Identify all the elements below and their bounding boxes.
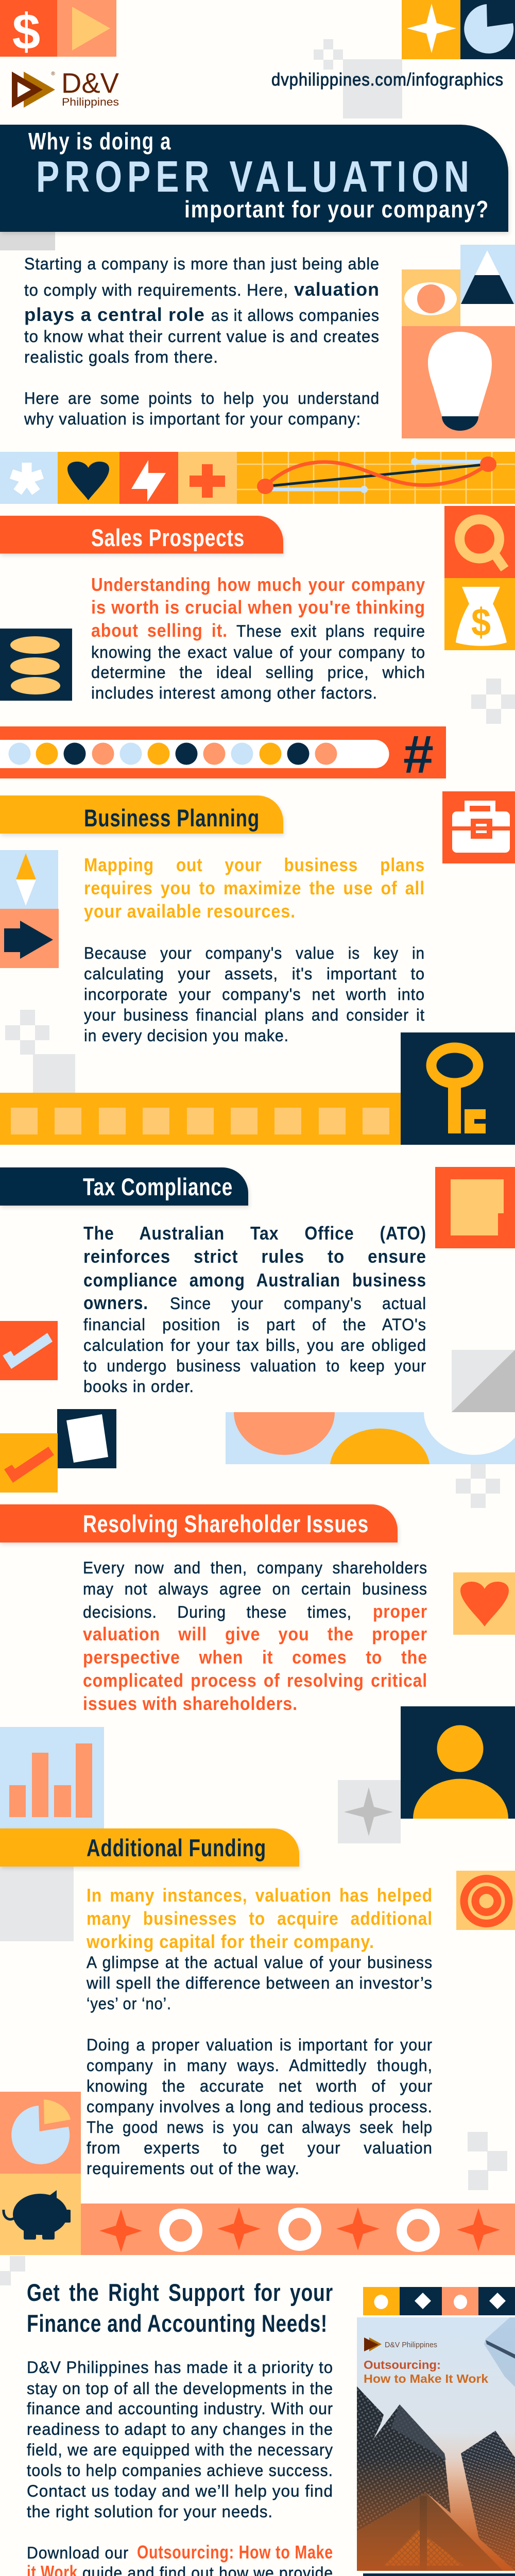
text block: shareholders: proper xyxy=(373,1601,427,1622)
text block: business planning xyxy=(84,854,425,1045)
icon: piggy bank tile xyxy=(0,2174,81,2255)
text block: sales: is worth is crucial when you're thinking xyxy=(91,597,425,618)
intro text block: valuation xyxy=(294,279,380,300)
intro text block: realistic goals from there. xyxy=(24,348,218,366)
text block: additional funding: company in many ways. Admittedly though, xyxy=(87,2056,433,2075)
section: Business Planning xyxy=(0,791,515,1145)
dots strip with hash: # xyxy=(403,725,434,785)
text block: shareholders: complicated process of resolving critical xyxy=(83,1670,427,1691)
text block: business planning: Mapping out your business plans xyxy=(84,854,425,875)
icon: briefcase tile xyxy=(442,791,515,863)
cover title: Outsourcing: xyxy=(364,2358,441,2371)
heading: Business Planning: Business Planning xyxy=(84,804,260,832)
text block: tax compliance: books in order. xyxy=(83,1377,194,1396)
text block: shareholders: decisions. During these times, xyxy=(83,1603,352,1621)
section: Tax Compliance xyxy=(0,1167,515,1508)
title banner: Why is doing a xyxy=(28,128,171,155)
stars and rings strip xyxy=(81,2204,515,2255)
header decorative tiles xyxy=(0,0,515,118)
text block: business planning: calculating your assets, it's important to xyxy=(84,964,425,983)
icon: check tile orange xyxy=(0,1433,58,1493)
section: Resolving Shareholder Issues xyxy=(0,1504,515,1843)
intro text block: Here are some points to help you understand xyxy=(24,389,380,408)
text block: business planning: in every decision you make. xyxy=(84,1026,289,1045)
icon: dollar tile xyxy=(0,0,57,60)
icon: paper tile xyxy=(57,1409,116,1468)
intro text block: to comply with requirements. Here, xyxy=(24,281,288,299)
text block: closing: D&V Philippines has made it a priority to xyxy=(27,2358,333,2377)
intro text block: why valuation is important for your company: xyxy=(24,410,361,428)
stripes under guide cover xyxy=(363,2573,515,2576)
guide cover xyxy=(357,2317,515,2571)
logo: D&V Philippines: ® xyxy=(51,71,55,77)
text block: sales: Understanding how much your company xyxy=(91,574,425,595)
text block: closing: Outsourcing: How to Make xyxy=(137,2541,333,2563)
heading: get the right support: Finance and Accounting Needs! xyxy=(27,2310,328,2337)
icon: eye xyxy=(402,269,460,326)
text block: additional funding: A glimpse at the actual value of your business xyxy=(87,1953,433,1972)
text block: additional funding: knowing the accurate net worth of your xyxy=(87,2077,433,2095)
text block: shareholders: Every now and then, company shareholders xyxy=(83,1558,427,1577)
grey pixel decoration xyxy=(5,1010,75,1093)
heading: Tax Compliance: Tax Compliance xyxy=(83,1173,233,1200)
text block: additional funding: ‘yes’ or ‘no’. xyxy=(87,1994,171,2013)
text block: additional funding: The good news is you can always seek help xyxy=(87,2118,433,2137)
heading: Tax Compliance xyxy=(0,1167,248,1206)
icon: arrow tile xyxy=(0,909,59,968)
text block: closing: the right solution for your needs. xyxy=(27,2502,273,2521)
text block: closing: field, we are equipped with the necessary xyxy=(27,2441,333,2459)
text block: additional funding: Doing a proper valuation is important for your xyxy=(87,2036,433,2054)
text block: tax compliance: financial position is part of the ATO's xyxy=(83,1315,426,1334)
icon: key tile xyxy=(401,1032,515,1145)
icon strip with graph xyxy=(0,452,515,504)
cover logo: D&V Philippines xyxy=(385,2341,437,2349)
heading: Resolving Shareholder Issues: Resolving Shareholder Issues xyxy=(83,1510,369,1537)
text block: additional funding xyxy=(86,1885,433,2178)
icon: star tile xyxy=(402,0,460,59)
icon: document tile xyxy=(435,1167,515,1248)
icon: pie chart tile xyxy=(0,2092,81,2174)
text block: shareholders: issues with shareholders. xyxy=(83,1693,298,1714)
grey pixel decoration xyxy=(0,2132,507,2285)
cover title xyxy=(364,2358,488,2385)
icon: compass tile xyxy=(0,850,58,909)
text block: sales: includes interest among other factors. xyxy=(91,684,377,702)
icon: money bag tile xyxy=(444,578,515,650)
icon: heart xyxy=(58,452,119,504)
icon: dollar tile: $ xyxy=(12,3,40,60)
text block: business planning: Because your company's value is key in xyxy=(84,944,425,962)
text block: additional funding: company involves a long and tedious process. xyxy=(87,2097,433,2116)
heading: Additional Funding: Additional Funding xyxy=(87,1834,266,1861)
text block: tax compliance: The Australian Tax Office (ATO) xyxy=(83,1223,426,1244)
text block: closing: readiness to adapt to any changes in the xyxy=(27,2420,333,2438)
text block: sales: determine the ideal selling price, which xyxy=(91,663,425,682)
icon: plus xyxy=(178,452,237,504)
text block: additional funding: working capital for their company. xyxy=(86,1931,374,1952)
heading: Sales Prospects: Sales Prospects xyxy=(91,524,245,551)
text block: business planning: incorporate your company's net worth into xyxy=(84,985,425,1004)
text block: closing xyxy=(27,2358,333,2576)
text block: tax compliance: to undergo business valuation to keep your xyxy=(83,1357,426,1375)
text block: closing: stay on top of all the developments in the xyxy=(27,2379,333,2398)
text block: tax compliance: compliance among Australian business xyxy=(83,1269,426,1291)
heading: Sales Prospects xyxy=(0,516,283,553)
icon: magnifier tile xyxy=(444,506,515,578)
grey pixel decoration xyxy=(314,39,402,118)
heading: get the right support xyxy=(27,2279,333,2337)
text block: shareholders xyxy=(83,1558,427,1714)
heading: Resolving Shareholder Issues xyxy=(0,1504,398,1543)
cover logo xyxy=(364,2337,437,2351)
section: closing call to action xyxy=(27,2279,515,2576)
text block: closing: Contact us today and we’ll help you find xyxy=(27,2482,333,2500)
title banner xyxy=(0,125,508,250)
icon: pie tile xyxy=(460,0,515,59)
text block: business planning: requires you to maximize the use of all xyxy=(84,877,425,899)
text block: tax compliance: owners. xyxy=(83,1292,148,1313)
icon: stacked coins tile xyxy=(0,629,72,701)
logo: D&V Philippines: Philippines xyxy=(62,96,119,108)
text block: closing: tools to help companies achieve success. xyxy=(27,2461,333,2480)
text block: business planning: your business financial plans and consider it xyxy=(84,1006,425,1024)
section: Additional Funding xyxy=(0,1828,515,2285)
intro text block: to know what their current value is and creates xyxy=(24,327,380,346)
grey pixel decoration xyxy=(456,1464,500,1508)
chart: curve on grid xyxy=(237,452,515,504)
logo: D&V Philippines: D&V xyxy=(61,67,119,99)
arches strip xyxy=(226,1412,515,1464)
icon: money bag tile: $ xyxy=(471,601,491,645)
bar chart tile xyxy=(0,1727,104,1828)
cover title: How to Make It Work xyxy=(364,2372,488,2385)
icon: heart tile xyxy=(453,1572,515,1635)
icon: lightning bolt xyxy=(119,452,178,504)
text block: closing: finance and accounting industry. With our xyxy=(27,2399,333,2418)
text block: tax compliance xyxy=(83,1223,426,1396)
text block: tax compliance: reinforces strict rules to ensure xyxy=(83,1246,426,1267)
text block: sales: knowing the exact value of your company to xyxy=(91,643,425,662)
icon: mountain xyxy=(460,245,515,304)
icon: asterisk xyxy=(0,452,58,504)
text block: sales xyxy=(91,574,425,702)
text block: additional funding: requirements out of the way. xyxy=(87,2159,300,2178)
intro text block: Starting a company is more than just being able xyxy=(24,255,380,273)
text block: tax compliance: calculation for your tax bills, you are obliged xyxy=(83,1336,426,1354)
text block: sales: about selling it. xyxy=(91,620,228,641)
text block: additional funding: many businesses to acquire additional xyxy=(87,1908,433,1929)
intro text block: as it allows companies xyxy=(211,306,380,325)
text block: sales: These exit plans require xyxy=(236,622,425,640)
icon: target tile xyxy=(456,1871,515,1930)
icon: light bulb xyxy=(402,326,515,438)
intro text block: plays a central role xyxy=(24,304,205,325)
text block: additional funding: will spell the difference between an investor’s xyxy=(86,1974,433,1992)
heading: Business Planning xyxy=(0,795,283,834)
text block: additional funding: In many instances, valuation has helped xyxy=(87,1885,433,1906)
icon: check tile blue xyxy=(0,1321,58,1380)
heading: get the right support: Get the Right Support for your xyxy=(27,2279,333,2306)
grey triangle tile xyxy=(452,1350,515,1412)
section: Sales Prospects xyxy=(0,506,515,785)
icon: person tile xyxy=(401,1706,515,1819)
icon: play tile xyxy=(57,0,116,57)
intro illustration tiles xyxy=(402,245,515,438)
intro text block xyxy=(24,255,380,428)
text block: shareholders: valuation will give you the proper xyxy=(83,1623,427,1645)
logo: D&V Philippines xyxy=(12,67,119,108)
dots strip with hash xyxy=(0,725,446,785)
icon: grey star tile xyxy=(338,1780,401,1843)
text block: additional funding: from experts to get your valuation xyxy=(87,2139,433,2157)
squares strip xyxy=(0,1093,401,1145)
text block: business planning: your available resources. xyxy=(84,901,296,922)
tile strip above guide cover xyxy=(363,2287,515,2315)
text block: closing: Download our xyxy=(27,2544,129,2562)
heading: Additional Funding xyxy=(0,1828,299,1941)
text block: shareholders: perspective when it comes to the xyxy=(83,1647,427,1668)
text block: shareholders: may not always agree on certain business xyxy=(83,1580,427,1598)
grey pixel decoration xyxy=(471,679,515,724)
cover buildings xyxy=(357,2317,515,2571)
text block: tax compliance: Since your company's actual xyxy=(170,1294,426,1313)
